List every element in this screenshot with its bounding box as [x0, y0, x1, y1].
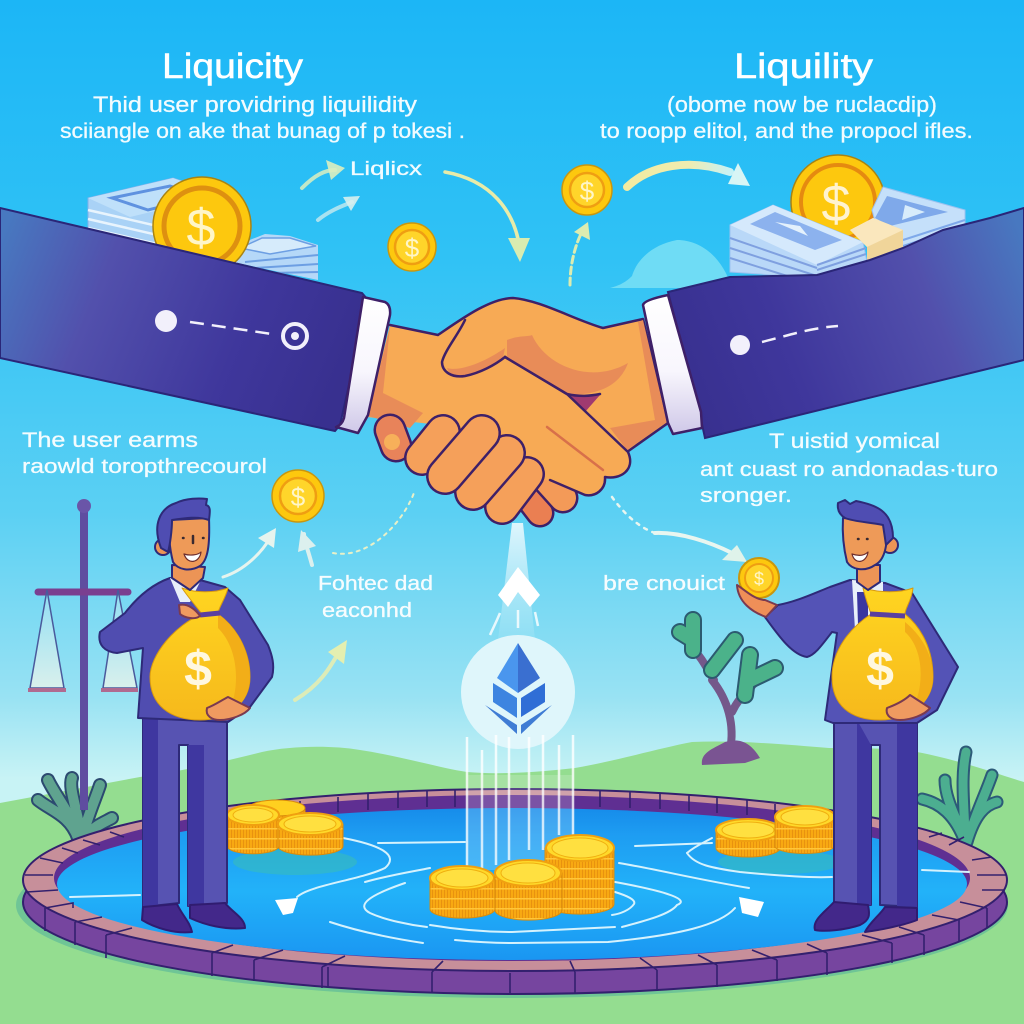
pond inner wall [54, 795, 970, 961]
handshake [336, 295, 702, 513]
coin stack: center middle [495, 860, 562, 920]
lower hand [887, 695, 930, 720]
ear [155, 539, 171, 555]
coin: small upper middle right [562, 165, 612, 215]
icon: sleeve node with dashes [155, 310, 307, 348]
back finger small [530, 500, 540, 513]
coin: small upper middle left [388, 223, 436, 271]
text block: right description: (obome now be ruclacdip) [667, 92, 937, 117]
neck [857, 565, 880, 590]
face [843, 518, 887, 569]
lower hand [207, 697, 250, 720]
neck [172, 565, 205, 590]
light streaks [490, 610, 538, 635]
finger crease [547, 427, 603, 470]
pond rim top [23, 789, 1007, 971]
coin: left large: $ [187, 199, 216, 257]
thumb fill [442, 320, 507, 376]
pointer left [275, 898, 298, 915]
thumb nub [384, 430, 400, 450]
left cuff [336, 297, 390, 433]
brick joints [25, 832, 1007, 994]
coin: small upper middle left: $ [405, 233, 420, 263]
left sleeve [0, 208, 368, 431]
hair [838, 500, 893, 545]
text block: lower right note: sronger. [700, 485, 792, 507]
coin: reward left: $ [291, 482, 306, 512]
shoes [142, 903, 245, 932]
coin stack: right pond tall [775, 806, 835, 854]
arrows: upper flow [302, 160, 750, 285]
right wrist shading [610, 320, 667, 450]
coin: right large [791, 155, 885, 249]
hair [157, 498, 210, 552]
water beam from handshake [498, 523, 535, 640]
upper hand [179, 605, 200, 618]
right hand back [438, 298, 668, 452]
left hand fill [367, 325, 630, 495]
text block: lower left reward: The user earms [22, 429, 198, 452]
arrow: chevron up [498, 567, 540, 607]
front bundle [730, 205, 867, 278]
thumb outline [442, 320, 505, 376]
pond rim side [23, 810, 1007, 994]
text block: left description: sciiangle on ake that bunag of p tokesi . [60, 120, 465, 143]
money bag: $ [866, 641, 894, 697]
coin: small upper middle right: $ [580, 176, 595, 206]
suit jacket [99, 578, 273, 722]
money bag: $ [184, 641, 212, 697]
face [169, 518, 209, 569]
pond ground shadow [16, 812, 1008, 998]
finger one [422, 432, 443, 458]
coin stack: left pond right [278, 813, 343, 855]
text block: lower right note [700, 430, 998, 507]
hand [737, 585, 777, 617]
smile [184, 552, 201, 561]
finger three [473, 453, 507, 492]
paper band [850, 218, 903, 262]
arrows: middle flow [223, 490, 747, 700]
legs [143, 718, 227, 907]
icon: sleeve node with dashes [730, 326, 838, 355]
coin stacks [227, 800, 835, 920]
plant: right shrub [922, 752, 997, 842]
money bag [832, 588, 933, 720]
text block: left description: Thid user providring liquilidity [93, 92, 417, 117]
coin stack: center back [545, 835, 614, 914]
coin stack: right pond low [716, 819, 780, 857]
pond [16, 735, 1008, 998]
coin: reward left [272, 470, 324, 522]
shoes [815, 902, 917, 932]
thumb shadow [447, 348, 505, 377]
stack reflections [233, 849, 842, 875]
text block: lower right note: T uistid yomical [769, 430, 940, 453]
eyes [858, 538, 868, 540]
shirt [170, 578, 200, 602]
heading: left Liquicity: Liquicity [162, 47, 304, 86]
gap between hands [570, 395, 600, 412]
icon: Ethereum token circle [461, 635, 575, 749]
ripples [70, 838, 969, 943]
legs [834, 718, 917, 907]
finger two [445, 433, 482, 476]
left wrist shading [368, 327, 423, 428]
label: bre cnouict: bre cnouict [603, 573, 726, 595]
man left [99, 498, 273, 932]
eyes and nose [183, 536, 204, 543]
coin stack: left pond back [249, 800, 305, 830]
waterfall streams [467, 735, 573, 870]
right cuff [643, 295, 702, 434]
label: Liqlicx: Liqlicx [350, 159, 423, 180]
shirt and tie [852, 580, 883, 630]
text block: lower left reward [22, 429, 267, 478]
left hand outlines [390, 325, 630, 495]
text block: center left note: Fohtec dad [318, 573, 433, 595]
cash stack left [88, 178, 318, 280]
coin in hand: $ [754, 569, 764, 589]
man right [737, 500, 958, 932]
scale left [28, 499, 138, 810]
text block: right description: to roopp elitol, and the propocl ifles. [600, 120, 973, 143]
cash stack right [730, 187, 965, 280]
ear [882, 537, 898, 553]
text block: right description [600, 92, 973, 143]
money bag [150, 588, 250, 720]
suit jacket with arm [765, 580, 958, 723]
right sleeve [668, 208, 1024, 438]
text block: center left note [318, 573, 433, 622]
tree [680, 620, 775, 765]
heading: right Liquility: Liquility [734, 47, 874, 86]
finger four [502, 474, 527, 507]
text block: lower right note: ant cuast ro andonadas·turo [700, 459, 998, 481]
coin: left large [153, 177, 251, 275]
text block: left description [60, 92, 465, 143]
ground with hills [0, 742, 1024, 1024]
pond water [57, 808, 967, 960]
coin stack: left pond front [227, 805, 279, 854]
right hand knuckle shading [507, 335, 628, 395]
plant: left shrub [38, 778, 112, 838]
text block: center left note: eaconhd [322, 600, 412, 622]
coin stack: center left [430, 866, 495, 918]
back rim bricks [300, 790, 775, 818]
back bundle [872, 187, 965, 252]
distant blue hill [610, 240, 732, 288]
text block: lower left reward: raowld toropthrecourol [22, 456, 267, 478]
smile [852, 552, 868, 561]
back finger middle [545, 478, 563, 498]
coin in hand [739, 558, 779, 598]
pointer right [739, 897, 764, 917]
coin: right large: $ [822, 175, 851, 233]
